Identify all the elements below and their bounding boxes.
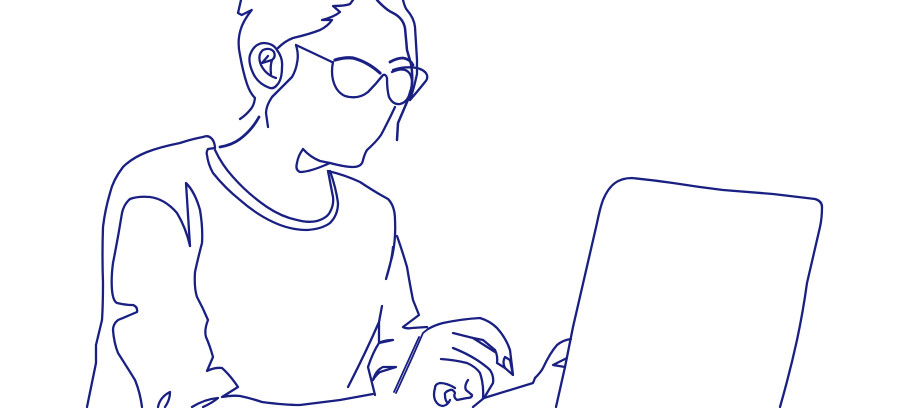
sleeve fold xyxy=(186,183,373,405)
face: temple and cheek line xyxy=(266,45,298,127)
fingers xyxy=(441,333,505,398)
sleeve cuff folds xyxy=(348,306,396,395)
thumb curl xyxy=(434,380,472,406)
hair: left side xyxy=(220,0,259,147)
hand outline xyxy=(428,318,513,375)
laptop screen xyxy=(556,178,822,407)
hand on keyboard xyxy=(394,318,571,407)
torso: sweater xyxy=(87,136,427,407)
glasses xyxy=(296,45,427,104)
collar xyxy=(207,148,338,230)
right shoulder xyxy=(328,171,395,279)
hair: top fringe xyxy=(278,0,353,48)
left shoulder and back xyxy=(87,136,215,407)
left sleeve xyxy=(112,197,190,407)
head: hair, ear, face and glasses xyxy=(220,0,427,172)
thumb tip behind screen xyxy=(553,358,567,367)
forearm on table xyxy=(473,339,571,407)
right arm xyxy=(397,236,427,328)
eyebrow xyxy=(390,58,413,65)
wrist xyxy=(394,329,428,393)
jaw and chin xyxy=(296,107,395,172)
hair: right side xyxy=(377,0,417,140)
ear xyxy=(249,43,282,88)
small folds at waist xyxy=(158,392,218,407)
